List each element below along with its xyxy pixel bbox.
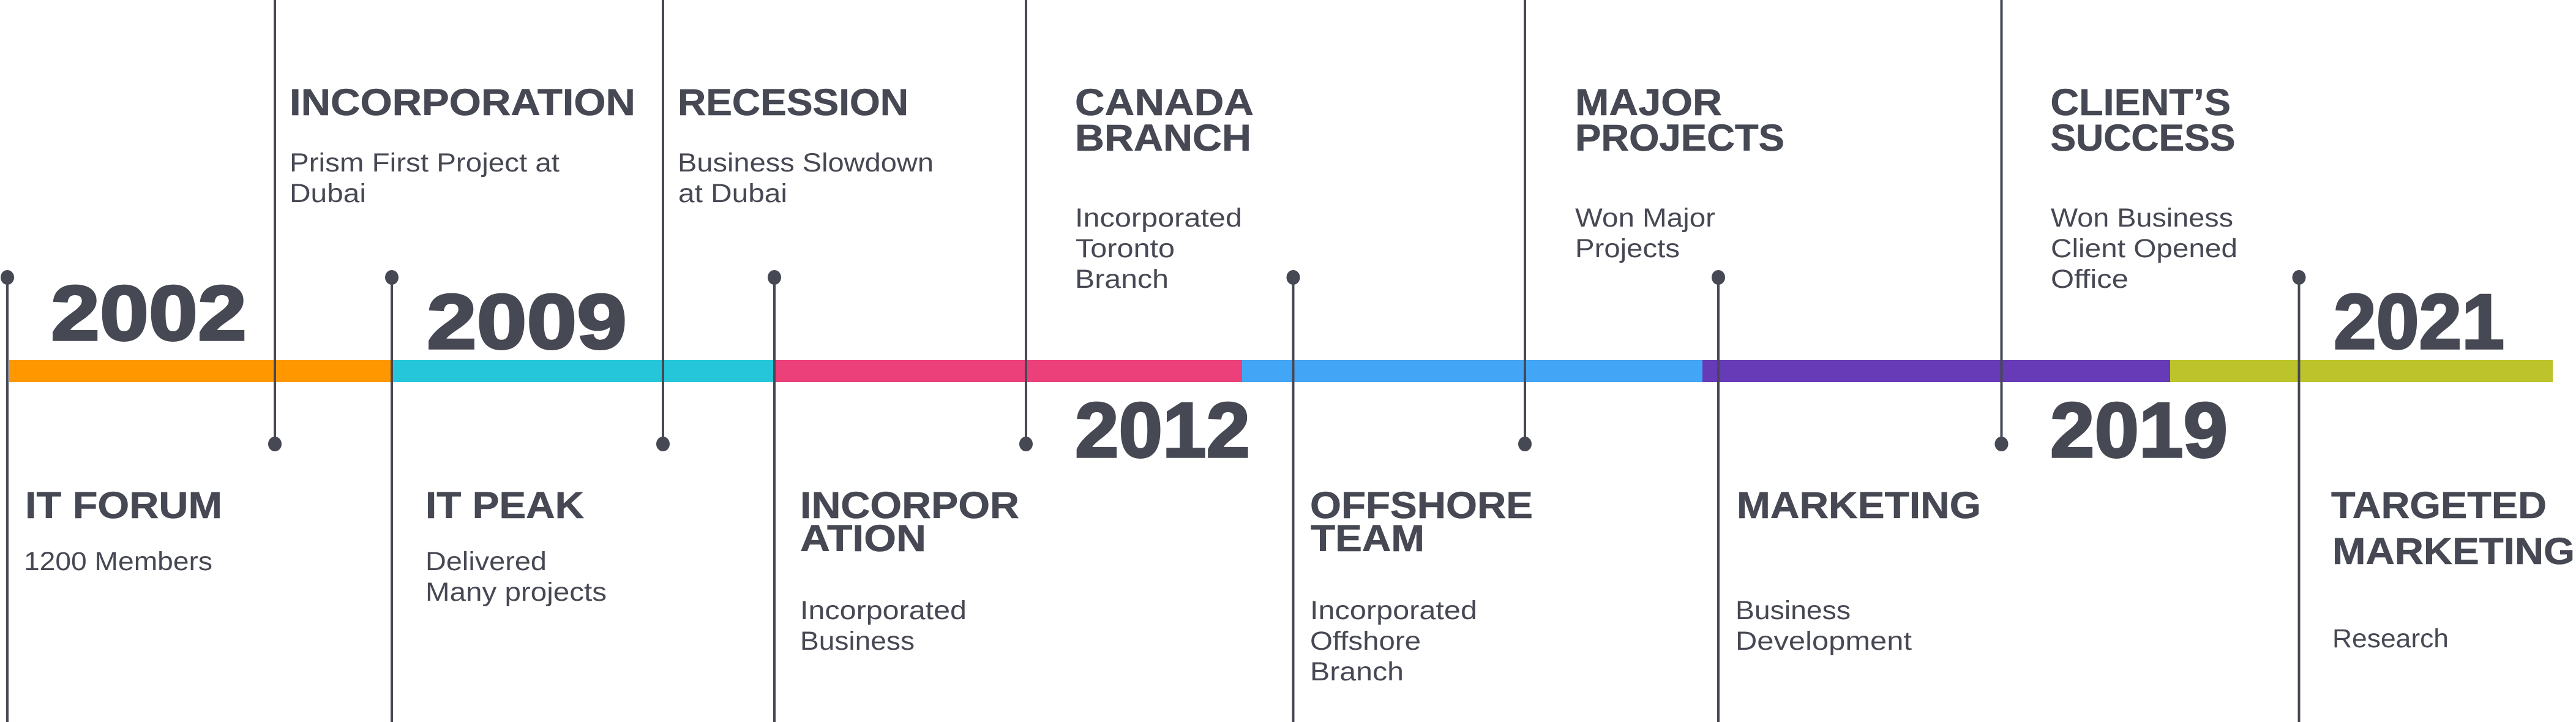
event: Canada Branch xyxy=(1075,81,1254,294)
event: IT Peak xyxy=(425,484,607,607)
connector: Targeted Marketing xyxy=(2292,270,2305,722)
description: Incorporated xyxy=(1075,203,1242,233)
heading: MARKETING xyxy=(2332,530,2575,572)
description: Office xyxy=(2051,265,2129,294)
description: Branch xyxy=(1310,657,1404,686)
description xyxy=(678,148,934,208)
bar segment: olive xyxy=(2170,360,2553,382)
heading: MAJOR xyxy=(1575,81,1722,123)
connector: Incorporation xyxy=(268,0,282,451)
heading: TARGETED xyxy=(2331,484,2547,526)
heading xyxy=(1310,484,1533,559)
description: Incorporated xyxy=(1310,596,1477,625)
bar segment: teal xyxy=(392,360,774,382)
description: Offshore xyxy=(1310,626,1421,656)
description: Business xyxy=(800,626,915,656)
connector: Recession xyxy=(656,0,670,451)
bar segment: purple xyxy=(1702,360,2170,382)
connector: Client's Success xyxy=(1994,0,2008,451)
heading xyxy=(2331,484,2575,572)
heading: ATION xyxy=(800,517,926,559)
description: Business Slowdown xyxy=(678,148,934,178)
description: Delivered xyxy=(425,547,547,576)
description: Research xyxy=(2332,624,2449,653)
event: IT Forum xyxy=(24,484,222,576)
description xyxy=(425,547,607,607)
description: Dubai xyxy=(290,179,366,208)
bar segment: blue xyxy=(1242,360,1702,382)
heading: IT PEAK xyxy=(425,484,584,526)
connector: Incorporation 2 xyxy=(768,270,781,722)
heading: PROJECTS xyxy=(1575,117,1784,159)
description: Client Opened xyxy=(2051,234,2237,263)
description: Projects xyxy=(1575,234,1680,263)
heading xyxy=(800,484,1019,559)
description xyxy=(1575,203,1715,263)
heading: MARKETING xyxy=(1737,484,1981,526)
description: Won Business xyxy=(2051,203,2233,233)
description xyxy=(1310,596,1477,686)
description xyxy=(1735,596,1912,656)
heading: RECESSION xyxy=(678,81,908,123)
heading: CLIENT’S xyxy=(2051,81,2231,123)
heading xyxy=(1075,81,1254,159)
heading: INCORPOR xyxy=(800,484,1019,526)
description xyxy=(1075,203,1242,294)
year 2019: 2019 xyxy=(2050,386,2228,473)
description: Toronto xyxy=(1076,234,1175,263)
description: Development xyxy=(1735,626,1912,656)
year 2002: 2002 xyxy=(51,269,247,356)
connector: Offshore Team xyxy=(1287,270,1300,722)
year 2009: 2009 xyxy=(427,278,627,365)
heading: BRANCH xyxy=(1075,117,1251,159)
description: Branch xyxy=(1075,265,1169,294)
connector: IT Peak xyxy=(385,270,399,722)
event: Incorporation xyxy=(290,81,635,208)
description: Many projects xyxy=(425,577,607,607)
year 2021: 2021 xyxy=(2334,278,2504,365)
event: Major Projects xyxy=(1575,81,1784,263)
description: 1200 Members xyxy=(24,547,212,576)
event: Recession xyxy=(678,81,934,208)
event: Offshore Team xyxy=(1310,484,1533,686)
description: Prism First Project at xyxy=(290,148,560,178)
description: at Dubai xyxy=(678,179,787,208)
description xyxy=(290,148,560,208)
connector: Canada Branch xyxy=(1019,0,1033,451)
event: Client's Success xyxy=(2051,81,2237,294)
heading: TEAM xyxy=(1311,517,1425,559)
description: Won Major xyxy=(1575,203,1715,233)
heading: CANADA xyxy=(1075,81,1254,123)
heading xyxy=(1575,81,1784,159)
event: Marketing xyxy=(1735,484,1981,656)
description xyxy=(2051,203,2237,294)
event: Targeted Marketing xyxy=(2331,484,2575,653)
description xyxy=(800,596,967,656)
bar segment: orange xyxy=(9,360,392,382)
heading: INCORPORATION xyxy=(290,81,635,123)
connector: Marketing xyxy=(1712,270,1725,722)
heading: OFFSHORE xyxy=(1310,484,1533,526)
heading: SUCCESS xyxy=(2051,117,2236,159)
connector: IT Forum xyxy=(1,270,14,722)
heading: IT FORUM xyxy=(25,484,222,526)
connector: Major Projects xyxy=(1518,0,1532,451)
timeline bar xyxy=(9,360,2553,382)
heading xyxy=(2051,81,2236,159)
year 2012: 2012 xyxy=(1075,386,1250,473)
bar segment: pink xyxy=(774,360,1242,382)
event: Incorporation (business) xyxy=(800,484,1019,656)
description: Business xyxy=(1735,596,1851,625)
description: Incorporated xyxy=(800,596,967,625)
